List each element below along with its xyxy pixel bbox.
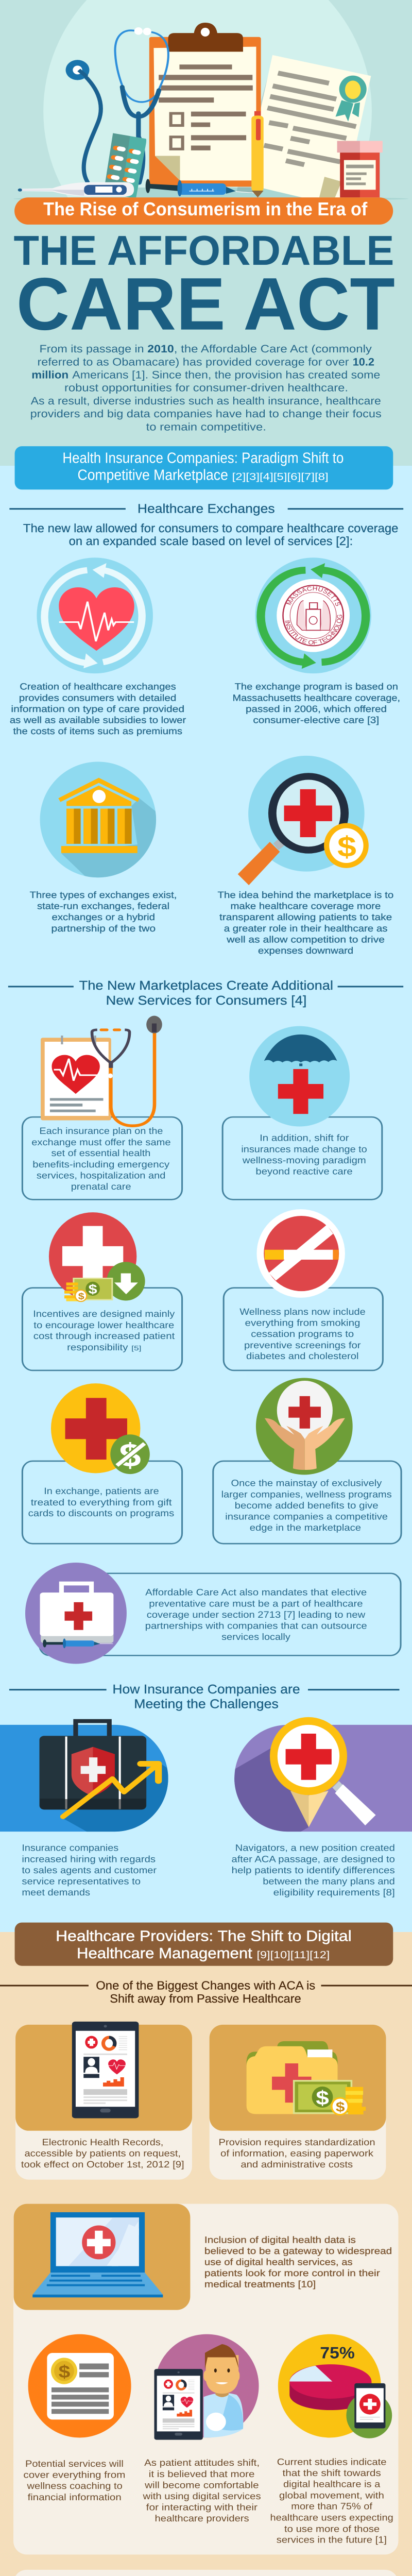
panel: wellness-moving paradigm (222, 1026, 382, 1199)
panel: wellness plans: Wellness plans now include (239, 1307, 366, 1317)
panel: wellness programs competitive edge: larger companies, wellness programs (221, 1489, 392, 1499)
icon: financial document: $ (59, 2362, 70, 2381)
caption: insurance hiring: to sales agents and customer (22, 1865, 157, 1875)
caption: three types of exchanges (30, 890, 177, 934)
heading: new marketplaces: The New Marketplaces Create Additional (79, 978, 333, 993)
card: electronic health records: accessible by patients on request, (24, 2148, 181, 2158)
panel: digital health data: medical treatments [10] (204, 2279, 316, 2289)
card: electronic health records (15, 2022, 192, 2180)
card: standardization provision: and administrative costs (241, 2159, 353, 2170)
caption: patient attitudes: As patient attitudes shift, (144, 2458, 260, 2468)
caption: potential services: wellness coaching to (27, 2481, 123, 2491)
hero illustration (0, 0, 412, 384)
heading: how insurance companies: Meeting the Challenges (134, 1697, 279, 1711)
caption: the idea behind the marketplace (217, 890, 393, 956)
caption: creation of exchanges: the costs of items such as premiums (13, 726, 182, 736)
icon: cross with crossed dollar: $ (119, 1437, 141, 1473)
panel: preventative care mandate: preventative care must be a part of healthcare (149, 1598, 363, 1608)
intro text: Americans [1]. Since then, the provision has created some (72, 369, 380, 381)
subheading: new law (23, 522, 398, 548)
panel: preventative care mandate: partnerships with companies that can outsource (145, 1620, 367, 1631)
section banner: health insurance companies: [2][3][4][5][6][7][8] (232, 471, 329, 482)
caption: the idea behind the marketplace: transparent allowing patients to take (219, 912, 392, 922)
caption: exchange program based on Massachusetts: The exchange program is based on (235, 681, 398, 692)
intro text: 2010 (147, 343, 174, 355)
icon: thermometer (18, 182, 134, 196)
icon: cross with crossed dollar (51, 1383, 150, 1474)
caption: the idea behind the marketplace: a greater role in their healthcare as (224, 923, 388, 934)
icon: syringe (146, 179, 258, 196)
section banner: healthcare providers: [9][10][11][12] (256, 1949, 330, 1961)
icon: folder with money: $ (316, 2087, 329, 2109)
icon: financial document (28, 2334, 131, 2437)
icon: 75 percent pie (278, 2334, 392, 2438)
panel: wellness programs competitive edge: Once the mainstay of exclusively (231, 1478, 382, 1488)
panel: preventative care mandate (25, 1563, 401, 1664)
panel: wellness programs competitive edge: insurance companies a competitive (225, 1511, 388, 1521)
background: hero teal (0, 0, 412, 466)
icon: pill pack (104, 133, 146, 197)
panel: patient rewards: treated to everything from gift (31, 1497, 172, 1507)
card: electronic health records: Electronic Health Records, (42, 2137, 163, 2147)
panel: wellness plans: everything from smoking (245, 1317, 360, 1328)
intro text (30, 343, 382, 433)
subheading: new law: on an expanded scale based on level of services [2]: (69, 534, 353, 548)
caption: patient attitudes: healthcare providers (155, 2513, 249, 2523)
panel: incentives: Incentives are designed mainly (33, 1309, 175, 1319)
caption: three types of exchanges: Three types of exchanges exist, (30, 890, 177, 900)
icon: magnifier over cross with coin (238, 756, 369, 885)
caption: current studies: digital healthcare is a (283, 2479, 381, 2489)
caption: creation of exchanges: provides consumers with detailed (19, 692, 176, 703)
heading: how insurance companies: How Insurance Companies are (112, 1682, 300, 1696)
caption: current studies: healthcare users expecting (270, 2512, 393, 2522)
caption: creation of exchanges: information on type of care provided (11, 704, 184, 714)
icon: no smoking (256, 1209, 345, 1298)
section banner: health insurance companies (15, 446, 393, 489)
icon: umbrella over cross (249, 1026, 350, 1126)
panel: mobile healthcare (0, 2570, 398, 2576)
section banner: healthcare providers (15, 1923, 393, 1966)
panel: wellness programs competitive edge: edge in the marketplace (250, 1522, 361, 1533)
caption: current studies: that the shift towards (282, 2468, 381, 2478)
panel: incentives: cost through increased patient (33, 1331, 175, 1341)
panel: patient rewards (22, 1383, 182, 1544)
icon: magnifier over cross with coin: $ (337, 831, 356, 863)
caption: three types of exchanges: partnership of the two (51, 923, 156, 934)
panel: essential health benefits: benefits-including emergency (32, 1159, 169, 1170)
icon: hands holding cross (256, 1378, 353, 1475)
caption: insurance hiring: service representatives to (22, 1876, 141, 1887)
card: standardization provision: of information, easing paperwork (220, 2148, 373, 2158)
panel: digital health data: use of digital health services, as (204, 2257, 353, 2267)
icon: clipboard with stethoscope (41, 1016, 162, 1126)
intro text: 10.2 (353, 356, 374, 368)
panel: patient rewards: cards to discounts on programs (28, 1508, 174, 1518)
caption: current studies: global movement, with (279, 2490, 384, 2500)
caption: patient attitudes: it is believed that more (149, 2469, 254, 2479)
icon: folder with money: $ (336, 2099, 345, 2115)
icon: medicine bottle (337, 141, 383, 197)
heading: shift from passive healthcare: One of the Biggest Changes with ACA is (96, 1979, 315, 1992)
intro text: million (31, 369, 68, 381)
icon: cross with money and down arrow: $ (89, 1282, 97, 1296)
icon: bank building (40, 761, 156, 877)
icon: pen (251, 111, 264, 197)
panel: digital health data: patients look for more control in their (204, 2268, 380, 2278)
caption: three types of exchanges: exchanges or a hybrid (52, 912, 155, 922)
icon: map pin magnifier (234, 1717, 412, 1832)
icon: Massachusetts seal with cycle arrows (255, 557, 371, 674)
caption: potential services: financial information (28, 2492, 122, 2502)
panel: patient rewards: In exchange, patients are (44, 1486, 159, 1496)
icon: heart with cycle arrows (37, 557, 153, 673)
caption: creation of exchanges (10, 681, 186, 736)
panel: wellness programs competitive edge (213, 1378, 401, 1544)
intro text: As a result, diverse industries such as health insurance, healthcare (31, 395, 381, 407)
background: insurance section blue (0, 466, 412, 1932)
intro text: to remain competitive. (146, 421, 266, 433)
caption: navigators: between the many plans and (263, 1876, 395, 1887)
caption: navigators: Navigators, a new position created (235, 1842, 395, 1853)
panel: essential health benefits: exchange must offer the same (31, 1137, 171, 1147)
intro text: robust opportunities for consumer-driven healthcare. (64, 382, 348, 394)
caption: exchange program based on Massachusetts: Massachusetts healthcare coverage, (233, 692, 400, 703)
section banner: health insurance companies: Competitive Marketplace (78, 466, 228, 483)
icon: tablet with records (72, 2022, 139, 2118)
panel: incentives: to encourage lower healthcare (33, 1320, 174, 1330)
panel: incentives (22, 1212, 182, 1370)
caption: exchange program based on Massachusetts: consumer-elective care [3] (253, 715, 379, 725)
caption: the idea behind the marketplace: expenses downward (258, 945, 353, 956)
panel: preventative care mandate: coverage under section 2713 [7] leading to new (147, 1609, 365, 1620)
caption: patient attitudes: will become comfortable (145, 2480, 259, 2490)
intro text: From its passage in (40, 343, 144, 355)
icon: Massachusetts seal with cycle arrows: INSTITUTE OF TECHNOLOGY (285, 615, 342, 645)
caption: insurance hiring (22, 1842, 157, 1897)
icon: Massachusetts seal with cycle arrows: MASSACHUSETTS (286, 586, 340, 606)
intro text: , the Affordable Care Act (commonly (174, 343, 372, 355)
panel: essential health benefits: prenatal care (71, 1181, 131, 1192)
heading: shift from passive healthcare (0, 1979, 412, 2005)
panel: digital health data (13, 2204, 398, 2554)
panel: wellness-moving paradigm: insurances made change to (241, 1144, 367, 1154)
panel: wellness-moving paradigm: In addition, shift for (260, 1132, 349, 1143)
caption: potential services (23, 2459, 125, 2502)
panel: essential health benefits: Each insurance plan on the (40, 1126, 163, 1136)
caption: insurance hiring: Insurance companies (22, 1842, 118, 1853)
caption: current studies (270, 2456, 393, 2545)
caption: insurance hiring: meet demands (22, 1887, 90, 1897)
panel: incentives: responsibility (67, 1342, 128, 1352)
caption: current studies: more than 75% of (291, 2501, 372, 2512)
caption: insurance hiring: increased hiring with regards (22, 1854, 156, 1864)
caption: potential services: cover everything from (23, 2469, 125, 2480)
card: electronic health records: took effect on October 1st, 2012 [9] (21, 2159, 184, 2170)
icon: clipboard (149, 23, 261, 187)
caption: exchange program based on Massachusetts: passed in 2006, which offered (246, 704, 387, 714)
section banner: healthcare providers: Healthcare Management (77, 1945, 252, 1962)
icon: man with tablet (154, 2334, 259, 2440)
heading: new marketplaces (8, 978, 403, 1008)
panel: wellness-moving paradigm: beyond reactive care (255, 1166, 353, 1176)
intro text: providers and big data companies have had to change their focus (30, 408, 382, 420)
caption: the idea behind the marketplace: well as allow competition to drive (227, 934, 385, 944)
icon: certificate (236, 55, 371, 197)
caption: patient attitudes: for interacting with their (146, 2502, 258, 2512)
caption: navigators (231, 1842, 395, 1897)
heading: healthcare exchanges: Healthcare Exchanges (138, 501, 275, 516)
panel: digital health data: Inclusion of digital health data is (204, 2234, 356, 2245)
icon: laptop with cross (32, 2212, 163, 2297)
icon: cross with money and down arrow: $ (78, 1291, 84, 1301)
heading: new marketplaces: New Services for Consumers [4] (106, 993, 306, 1008)
panel: essential health benefits: set of essential health (51, 1148, 150, 1158)
panel: incentives: [5] (131, 1345, 141, 1352)
card: standardization provision: Provision requires standardization (218, 2137, 375, 2147)
panel: essential health benefits (22, 1016, 182, 1199)
icon: 75 percent pie: 75% (320, 2344, 355, 2362)
intro text: referred to as Obamacare) has provided coverage for over (37, 356, 349, 368)
heading: shift from passive healthcare: Shift away from Passive Healthcare (110, 1992, 301, 2005)
icon: briefcase with rising arrow (0, 1721, 168, 1832)
caption: current studies: services in the future [1] (277, 2534, 387, 2545)
caption: three types of exchanges: state-run exchanges, federal (37, 901, 169, 911)
caption: navigators: eligibility requirements [8] (273, 1887, 395, 1897)
icon: first aid kit (25, 1563, 127, 1664)
caption: potential services: Potential services will (25, 2459, 124, 2469)
icon: stethoscope (66, 27, 168, 183)
caption: exchange program based on Massachusetts (233, 681, 400, 725)
icon: cross with money and down arrow (49, 1212, 145, 1301)
panel: digital health data: believed to be a gateway to widespread (204, 2246, 392, 2256)
panel: wellness-moving paradigm: wellness-moving paradigm (242, 1155, 366, 1165)
caption: patient attitudes (143, 2458, 261, 2523)
panel: wellness plans (224, 1209, 383, 1370)
panel: wellness plans: diabetes and cholesterol (246, 1351, 358, 1361)
icon: folder with money (247, 2041, 366, 2115)
caption: patient attitudes: with using digital services (143, 2491, 261, 2501)
card: standardization provision (210, 2025, 386, 2180)
caption: creation of exchanges: as well as available subsidies to lower (10, 715, 186, 725)
heading: how insurance companies (9, 1682, 400, 1711)
background: providers section tan (0, 1932, 412, 2576)
title banner (14, 197, 393, 225)
caption: current studies: Current studies indicate (277, 2456, 387, 2467)
panel: preventative care mandate: Affordable Care Act also mandates that elective (145, 1587, 367, 1597)
caption: navigators: help patients to identify differences (231, 1865, 395, 1875)
panel: preventative care mandate: services locally (221, 1632, 290, 1642)
title (14, 227, 395, 345)
caption: navigators: after ACA passage, are designed to (231, 1854, 395, 1864)
panel: wellness plans: preventive screenings for (244, 1340, 361, 1350)
panel: essential health benefits: services, hospitalization and (37, 1170, 165, 1180)
panel: wellness programs competitive edge: become added benefits to give (235, 1500, 379, 1511)
caption: current studies: to use more of those (284, 2523, 380, 2534)
section banner: healthcare providers: Healthcare Providers: The Shift to Digital (56, 1927, 352, 1944)
caption: the idea behind the marketplace: The idea behind the marketplace is to (217, 890, 393, 900)
caption: creation of exchanges: Creation of healthcare exchanges (20, 681, 176, 692)
caption: the idea behind the marketplace: make healthcare coverage more (230, 901, 381, 911)
panel: wellness plans: cessation programs to (251, 1329, 354, 1339)
